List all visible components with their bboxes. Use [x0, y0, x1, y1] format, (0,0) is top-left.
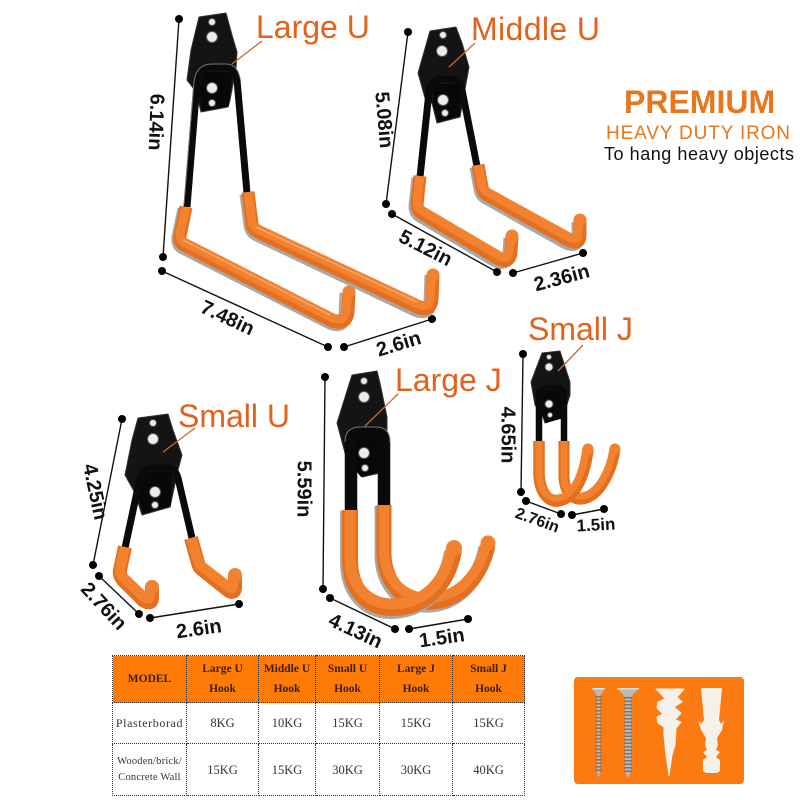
dimension: height 5.59in: 5.59in — [293, 461, 315, 517]
leader line — [558, 345, 583, 371]
load capacity table: 15KG — [473, 716, 504, 730]
load capacity table: 40KG — [473, 762, 504, 776]
black wire arm — [125, 468, 192, 548]
load capacity table: 30KG — [401, 762, 431, 776]
dimension: width 2.6in — [340, 315, 436, 361]
orange panel — [574, 677, 744, 784]
dimension: width 2.36in — [509, 249, 592, 296]
leader line — [232, 41, 262, 64]
load capacity table: MODEL — [128, 673, 171, 685]
inner plate — [199, 72, 232, 111]
plate — [531, 351, 570, 423]
load capacity table: Concrete Wall — [118, 772, 181, 782]
dimension: depth 4.13in — [325, 594, 399, 653]
dimension: height 5.59in — [293, 373, 329, 593]
orange coated arm: right — [246, 192, 440, 312]
orange coated arm: back — [564, 441, 620, 499]
load capacity table: Small J — [470, 663, 507, 675]
leader line — [449, 43, 475, 67]
icon: large screw — [617, 688, 639, 778]
mounting holes — [358, 378, 370, 472]
dimension: width 1.5in — [568, 505, 616, 535]
hook: Small J — [497, 311, 633, 536]
plate — [337, 371, 387, 477]
plate — [418, 27, 469, 123]
dimension: height 4.65in: 4.65in — [497, 407, 519, 463]
mounting holes — [148, 420, 160, 508]
load capacity table: Hook — [403, 683, 429, 695]
dimension: length 5.12in: 5.12in — [395, 226, 456, 271]
dimension: length 7.48in — [158, 267, 332, 351]
promo text: premium heavy duty iron: HEAVY DUTY IRON — [606, 123, 790, 144]
black wire arm — [187, 67, 247, 207]
dimension: width 1.5in: 1.5in — [418, 624, 466, 652]
dimension: depth 2.76in: 2.76in — [513, 505, 561, 536]
orange coated arm: left — [415, 176, 518, 262]
label: Middle U: Middle U — [471, 11, 600, 47]
dimension: width 2.6in: 2.6in — [175, 615, 223, 643]
dimension: height 4.65in — [497, 350, 527, 496]
leader line — [365, 394, 398, 426]
dimension: height 4.25in — [78, 415, 126, 569]
dimension: height 6.14in: 6.14in — [144, 93, 168, 151]
load capacity table: Hook — [274, 683, 300, 695]
black wire arm — [539, 388, 564, 442]
dimension: depth 4.13in: 4.13in — [325, 609, 386, 653]
orange coated arm: back — [382, 505, 496, 605]
load capacity table: 8KG — [210, 716, 235, 730]
mounting holes — [436, 32, 448, 116]
load capacity table: Wooden/brick/ — [117, 756, 182, 766]
hook: Large U — [144, 9, 440, 361]
load capacity table: Large U — [202, 663, 243, 675]
orange coated arm: right — [476, 165, 586, 245]
load capacity table: 15KG — [332, 716, 363, 730]
dimension: width 1.5in: 1.5in — [576, 514, 616, 535]
dimension: height 4.25in: 4.25in — [78, 462, 111, 522]
leader line — [163, 428, 195, 452]
label: Small J: Small J — [528, 311, 633, 347]
icon: ribbed wall anchor — [656, 689, 684, 776]
dimension: width 2.6in: 2.6in — [374, 327, 424, 361]
load capacity table: Plasterborad — [116, 716, 183, 730]
dimension: depth 2.76in: 2.76in — [76, 578, 131, 635]
plate — [187, 13, 237, 112]
label: Small U: Small U — [178, 398, 290, 434]
dimension: height 5.08in: 5.08in — [370, 91, 397, 149]
load capacity table — [112, 655, 525, 796]
orange coated arm: front — [348, 510, 462, 611]
load capacity table: Small U — [328, 663, 367, 675]
load capacity table: 10KG — [272, 716, 302, 730]
hook: Small U — [76, 398, 290, 643]
orange coated arm: left — [120, 547, 159, 602]
hardware panel: screws and wall anchors — [574, 677, 744, 784]
hook: Middle U — [370, 11, 600, 296]
dimension: width 2.6in — [146, 600, 243, 643]
promo text: premium heavy duty iron: To hang heavy objects — [604, 144, 794, 164]
black wire arm — [351, 433, 384, 510]
load capacity table: 15KG — [207, 762, 238, 776]
dimension: width 1.5in — [405, 615, 472, 652]
icon: expansion wall plug — [698, 688, 724, 773]
load capacity table: Hook — [209, 683, 236, 695]
load capacity table: Hook — [475, 683, 502, 695]
plate — [125, 414, 182, 515]
inner plate — [351, 434, 384, 477]
hook: Large J — [293, 362, 502, 653]
inner plate — [138, 472, 172, 514]
dimension: height 5.08in — [370, 28, 412, 208]
dimension: width 2.36in: 2.36in — [532, 260, 592, 296]
load capacity table: 15KG — [401, 716, 431, 730]
orange coated arm: left — [178, 207, 356, 325]
label: Large U: Large U — [256, 9, 370, 45]
dimension: length 7.48in: 7.48in — [197, 296, 258, 340]
inner plate — [433, 84, 460, 122]
load capacity table: 30KG — [332, 762, 363, 776]
inner plate — [541, 390, 565, 423]
dimension: height 6.14in — [144, 15, 183, 261]
dimension: length 5.12in — [388, 210, 501, 276]
black wire arm — [420, 79, 477, 177]
load capacity table: 15KG — [272, 762, 302, 776]
icon: small screw — [592, 688, 605, 778]
label: Large J: Large J — [395, 362, 502, 398]
load capacity table: Large J — [397, 663, 435, 675]
orange coated arm: front — [539, 441, 594, 501]
promo text: premium heavy duty iron: PREMIUM — [624, 84, 775, 120]
load capacity table: Hook — [334, 683, 361, 695]
promo text: premium heavy duty iron — [604, 84, 794, 164]
load capacity table: Middle U — [264, 663, 310, 675]
orange coated arm: right — [191, 538, 242, 592]
mounting holes — [206, 18, 218, 106]
mounting holes — [545, 354, 553, 418]
